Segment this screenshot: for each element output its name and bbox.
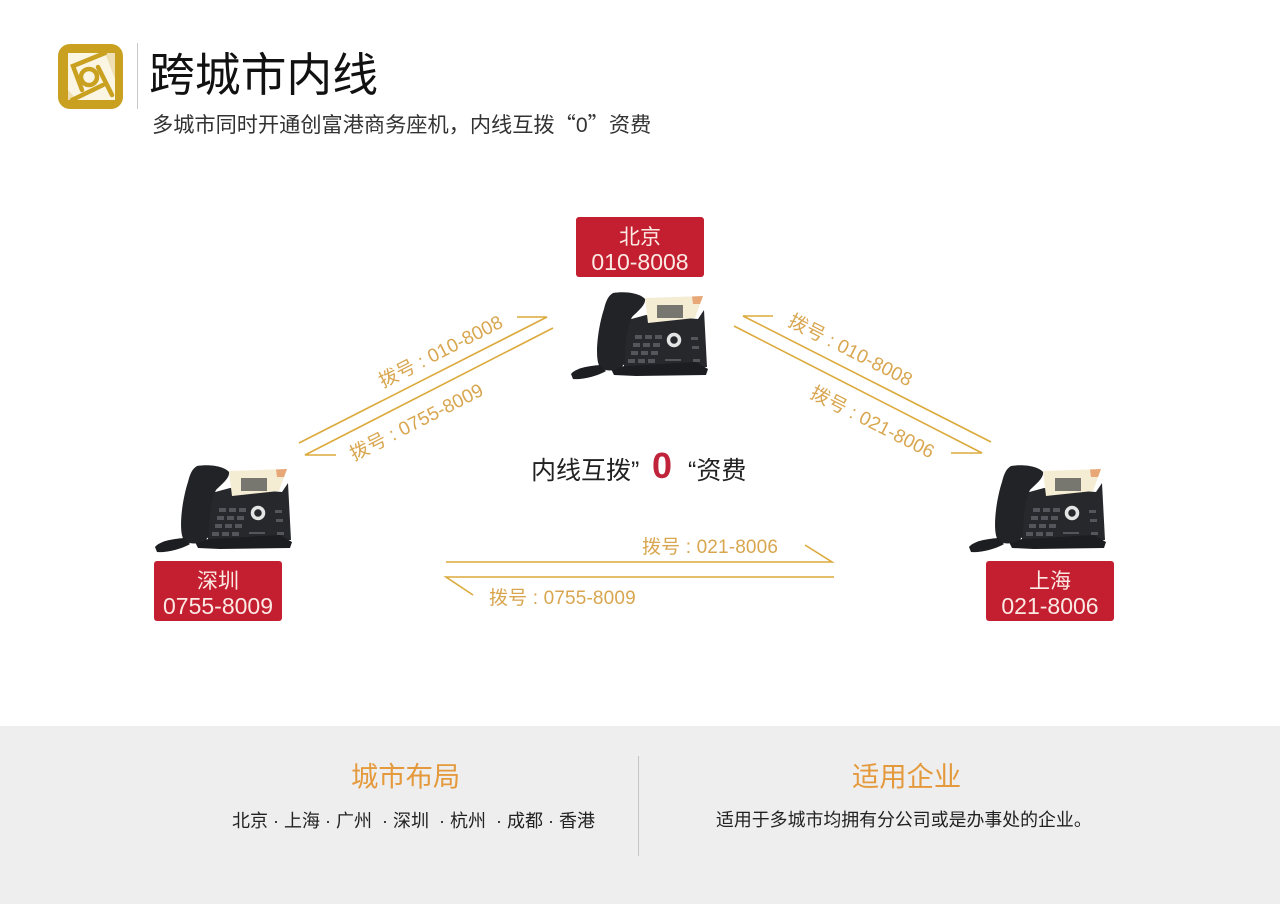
title: 跨城市内线 bbox=[149, 50, 378, 101]
heading: city layout: 城市布局 bbox=[351, 761, 460, 792]
label: Shenzhen: 0755-8009 bbox=[163, 593, 273, 619]
panel: bottom info bbox=[0, 726, 1280, 904]
center slogan: 内线互拨” bbox=[531, 457, 639, 485]
icon: phone Shanghai bbox=[969, 465, 1106, 552]
label: dial 0755-8009 bottom: 拨号 : 0755-8009 bbox=[489, 587, 636, 609]
arrow: Beijing to Shenzhen bbox=[305, 328, 553, 455]
arrow: Shanghai to Shenzhen bbox=[446, 577, 834, 595]
label: Beijing bbox=[576, 217, 704, 277]
label: Shenzhen bbox=[154, 561, 282, 621]
label: Shanghai: 021-8006 bbox=[1001, 593, 1099, 619]
label: Beijing: 北京 bbox=[619, 226, 661, 249]
heading: suitable companies: 适用企业 bbox=[852, 761, 961, 792]
arrow: Shanghai to Beijing bbox=[743, 316, 991, 442]
arrow: Shenzhen to Shanghai bbox=[446, 545, 832, 562]
center slogan: 0 bbox=[652, 445, 672, 486]
label: dial 021-8006 bottom: 拨号 : 021-8006 bbox=[642, 536, 778, 558]
label: Beijing: 010-8008 bbox=[591, 249, 689, 275]
label: dial 010-8008 right: 拨号 : 010-8008 bbox=[785, 310, 916, 391]
label: dial 010-8008 left: 拨号 : 010-8008 bbox=[375, 311, 507, 392]
icon: phone Shenzhen bbox=[155, 465, 292, 552]
vertical header divider bbox=[137, 43, 138, 109]
label: Shanghai bbox=[986, 561, 1114, 621]
center slogan: “资费 bbox=[688, 457, 746, 485]
divider bbox=[638, 756, 639, 856]
arrow: Shenzhen to Beijing bbox=[299, 317, 547, 443]
label: dial 021-8006 right: 拨号 : 021-8006 bbox=[807, 382, 938, 463]
center slogan bbox=[531, 445, 746, 486]
label: Shanghai: 上海 bbox=[1029, 570, 1071, 593]
arrow: Beijing to Shanghai bbox=[734, 326, 982, 453]
label: dial 0755-8009 left: 拨号 : 0755-8009 bbox=[346, 379, 487, 465]
text: suitable description: 适用于多城市均拥有分公司或是办事处的企业。 bbox=[716, 810, 1092, 830]
icon: phone Beijing bbox=[571, 292, 708, 379]
subtitle: 多城市同时开通创富港商务座机，内线互拨“0”资费 bbox=[152, 108, 651, 139]
label: Shenzhen: 深圳 bbox=[197, 570, 239, 593]
icon: company logo bbox=[58, 44, 123, 109]
text: city list: 北京 · 上海 · 广州 · 深圳 · 杭州 · 成都 · 香港 bbox=[232, 811, 595, 831]
